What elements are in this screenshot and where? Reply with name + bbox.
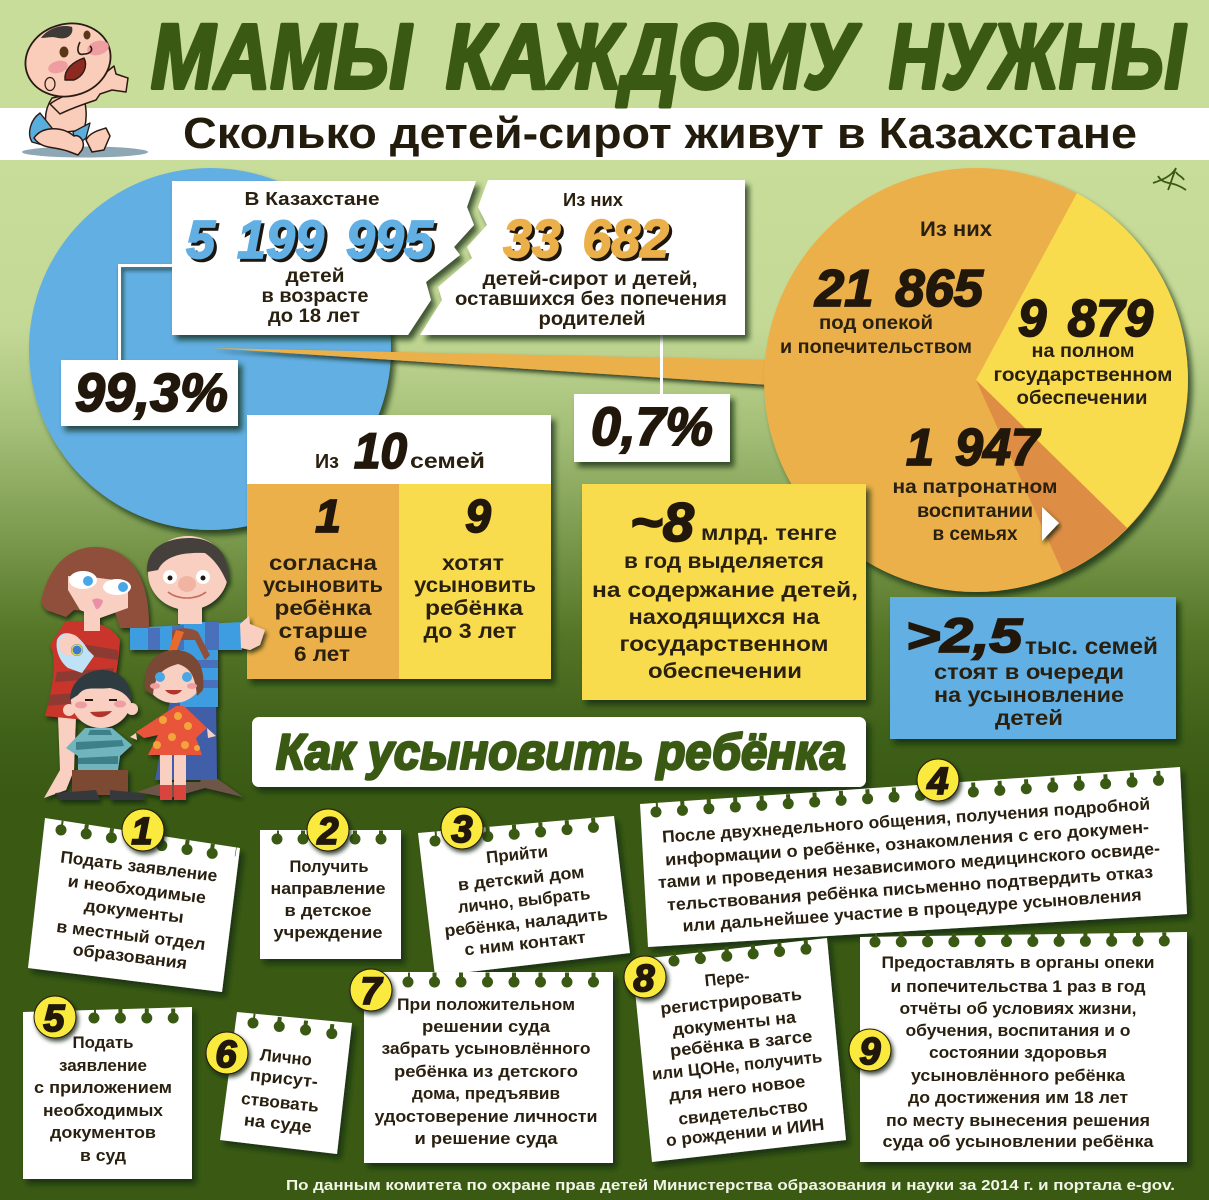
note 1 [28, 818, 240, 992]
panel: out of 10 families: 6 лет [294, 643, 350, 666]
note 2: направление [270, 879, 386, 898]
pie labels: воспитании [917, 501, 1033, 522]
panel: 5 199 995 children: до 18 лет [268, 306, 360, 327]
panel: out of 10 families: хотят [442, 552, 504, 575]
badge 1 [122, 809, 164, 853]
badge 6: 6 [215, 1034, 237, 1076]
badge 3: 3 [451, 809, 473, 851]
note 5: заявление [59, 1056, 147, 1075]
note 9: суда об усыновлении ребёнка [882, 1132, 1154, 1151]
connector 0,7% [660, 335, 663, 395]
panel: out of 10 families: семей [410, 450, 485, 473]
note 4: После двухнедельного общения, получения подробной [661, 794, 1151, 847]
badge 9: 9 [859, 1031, 881, 1073]
panel: 2.5 thousand families: >2,5 [906, 610, 1024, 663]
pie labels: в семьях [932, 524, 1018, 545]
badge 8: 8 [633, 958, 655, 1000]
infant [57, 633, 94, 673]
badge 5: 5 [43, 998, 65, 1040]
badge 2 [307, 809, 349, 853]
badge 3 [441, 807, 483, 851]
panel: out of 10 families: ребёнка [274, 597, 372, 620]
panel: out of 10 families: усыновить [414, 574, 536, 597]
note 4: информации о ребёнке, ознакомления с его докумен- [664, 818, 1150, 869]
panel: 5 199 995 children: в возрасте [262, 286, 368, 307]
badge 5 [34, 996, 76, 1040]
note 8: документы на [671, 1008, 797, 1039]
note 4 [640, 767, 1187, 947]
badge 6 [206, 1032, 248, 1076]
panel: out of 10 families: Из [315, 451, 339, 473]
note 3: с ним контакт [463, 928, 587, 959]
note 7: решении суда [422, 1017, 551, 1036]
subtitle: Сколько детей-сирот живут в Казахстане [183, 109, 1137, 158]
panel: 33 682 orphans: 33 682 [503, 209, 669, 269]
panel: 2.5 thousand families: на усыновление [934, 684, 1124, 707]
panel: out of 10 families: ребёнка [425, 597, 523, 620]
icon: white pointer [1042, 507, 1059, 541]
pie labels: под опекой [819, 313, 933, 334]
note 5: необходимых [43, 1101, 164, 1120]
panel: 33 682 orphans: Из них [563, 190, 623, 210]
note 8: свидетельство [677, 1096, 809, 1129]
note 9: обучения, воспитания и о [906, 1021, 1130, 1040]
callout: 0,7%: 0,7% [591, 397, 713, 457]
note 5: в суд [80, 1146, 126, 1165]
note 6 [220, 1012, 352, 1154]
panel: 8 billion tenge: на содержание детей, [592, 579, 858, 602]
note 8 [632, 938, 846, 1162]
note 6: на суде [243, 1110, 313, 1136]
note 9: усыновлённого ребёнка [911, 1066, 1126, 1085]
panel: 33 682 orphans: оставшихся без попечения [455, 289, 727, 310]
callout: 0,7% [574, 394, 730, 462]
note 9: до достижения им 18 лет [908, 1088, 1128, 1107]
title: КАЖДОМУ [446, 6, 862, 108]
note 3: лично, выбрать [457, 884, 591, 917]
note 1: Подать заявление [59, 847, 219, 886]
panel: 8 billion tenge [582, 484, 866, 700]
title: МАМЫ [151, 6, 413, 108]
pie labels [780, 218, 1172, 545]
chart: blue circle 99.3% [29, 168, 391, 530]
note 3: Прийти [485, 842, 549, 867]
note 9 [860, 932, 1187, 1162]
callout: 99,3%: 99,3% [75, 363, 228, 423]
note 8: регистрировать [659, 985, 803, 1018]
badge 9 [849, 1029, 891, 1073]
note 7 [364, 972, 613, 1163]
pie labels: 21 865 [814, 260, 984, 318]
pie labels: на полном [1032, 341, 1134, 362]
panel: 2.5 thousand families: стоят в очереди [934, 661, 1124, 684]
note 8: Пере- [704, 967, 750, 990]
panel: 33 682 orphans: детей-сирот и детей, [482, 269, 698, 290]
panel: 5 199 995 children: детей [286, 266, 344, 287]
note 8: или ЦОНе, получить [651, 1047, 823, 1084]
note 5: с приложением [34, 1078, 172, 1097]
title [151, 6, 1187, 108]
pie labels: Из них [920, 218, 992, 241]
note 5: документов [50, 1123, 156, 1142]
note 2 [260, 830, 401, 959]
girl [130, 628, 216, 800]
panel: 33 682 orphans [420, 180, 745, 335]
note 4: или дальнейшее участие в процедуре усыновления [682, 885, 1142, 936]
note 2: учреждение [274, 923, 382, 942]
note 4: тельствования ребёнка письменно подтвердить отказ [666, 862, 1154, 915]
panel: 8 billion tenge: в год выделяется [624, 550, 824, 573]
note 5: Подать [72, 1033, 134, 1052]
pie labels: и попечительством [780, 337, 972, 358]
panel: out of 10 families: усыновить [263, 574, 383, 597]
note 9: отчёты об условиях жизни, [900, 999, 1136, 1018]
panel: 5 199 995 children: 5 199 995 [186, 210, 434, 270]
connector 99,3% [120, 266, 172, 362]
note 7: и решение суда [414, 1129, 558, 1148]
father [130, 536, 265, 798]
badge 1: 1 [131, 811, 153, 853]
note 2: в детское [284, 901, 372, 920]
panel: out of 10 families: до 3 лет [424, 620, 516, 643]
note 9: и попечительства 1 раз в год [890, 977, 1146, 996]
panel: 2.5 thousand families [890, 597, 1176, 739]
panel: 8 billion tenge: государственном [620, 633, 828, 656]
mother [41, 547, 149, 798]
note 3: в детский дом [457, 862, 585, 895]
signature mark [1153, 168, 1186, 190]
note 7: ребёнка из детского [394, 1062, 578, 1081]
panel: 8 billion tenge: обеспечении [648, 660, 802, 683]
chart: orange pie [764, 168, 1188, 592]
note 5 [23, 1007, 192, 1179]
badge 7 [350, 969, 392, 1013]
pie labels: 9 879 [1018, 290, 1153, 348]
note 9: Предоставлять в органы опеки [882, 953, 1154, 972]
badge 4 [917, 759, 959, 803]
heading: how to adopt: Как усыновить ребёнка [276, 724, 846, 780]
panel: out of 10 families [247, 415, 551, 679]
pie labels: на патронатном [892, 477, 1058, 498]
arrow: wedge from blue circle to pie [212, 348, 770, 385]
note 9: по месту вынесения решения [886, 1111, 1150, 1130]
pie labels: обеспечении [1016, 388, 1148, 409]
note 6: Лично [259, 1045, 313, 1070]
badge 7: 7 [360, 971, 383, 1013]
panel: 8 billion tenge: млрд. тенге [701, 522, 837, 545]
panel: 8 billion tenge: находящихся на [628, 606, 820, 629]
note 3 [418, 816, 630, 976]
note 6: присут- [249, 1065, 319, 1091]
note 8: для него новое [668, 1072, 806, 1105]
note 1: образования [72, 940, 188, 973]
pie labels: 1 947 [906, 419, 1041, 477]
panel: out of 10 families: согласна [269, 552, 377, 575]
note 7: При положительном [397, 995, 575, 1014]
boy [55, 670, 146, 800]
note 9: состоянии здоровья [929, 1043, 1107, 1062]
badge 4: 4 [926, 761, 949, 803]
pie slice: foster [976, 380, 1127, 573]
note 7: удостоверение личности [374, 1107, 598, 1126]
note 1: в местный отдел [55, 917, 207, 954]
badge 8 [624, 956, 666, 1000]
panel: out of 10 families: 10 [354, 423, 407, 479]
badge 2: 2 [316, 811, 339, 853]
icon: family [41, 536, 265, 800]
panel: 5 199 995 children [172, 181, 476, 335]
note 6: ствовать [240, 1089, 320, 1116]
note 2: Получить [290, 857, 368, 876]
panel: 2.5 thousand families: тыс. семей [1025, 633, 1158, 659]
panel: 2.5 thousand families: детей [995, 707, 1063, 730]
pie labels: государственном [994, 365, 1172, 386]
panel: 5 199 995 children: В Казахстане [244, 189, 380, 209]
note 1: и необходимые [67, 872, 207, 907]
note 7: забрать усыновлённого [382, 1039, 590, 1058]
note 7: дома, предъявив [412, 1084, 560, 1103]
note 8: о рождении и ИИН [665, 1115, 825, 1150]
note 8: ребёнка в загсе [669, 1027, 813, 1060]
panel: 8 billion tenge: ~8 [630, 491, 694, 553]
note 4: тами и проведения независимого медицинского освиде- [657, 839, 1161, 892]
icon: baby [17, 14, 148, 157]
note 3: ребёнка, наладить [444, 904, 609, 941]
source footer: По данным комитета по охране прав детей Министерства образования и науки за 2014 г. и портала e-gov. [286, 1177, 1175, 1194]
panel: out of 10 families: старше [278, 620, 368, 643]
panel: out of 10 families: 9 [465, 490, 491, 542]
note 1: документы [83, 896, 185, 927]
panel: out of 10 families: 1 [315, 490, 341, 542]
pie slice: state care [976, 193, 1188, 528]
panel: 33 682 orphans: родителей [538, 309, 646, 330]
